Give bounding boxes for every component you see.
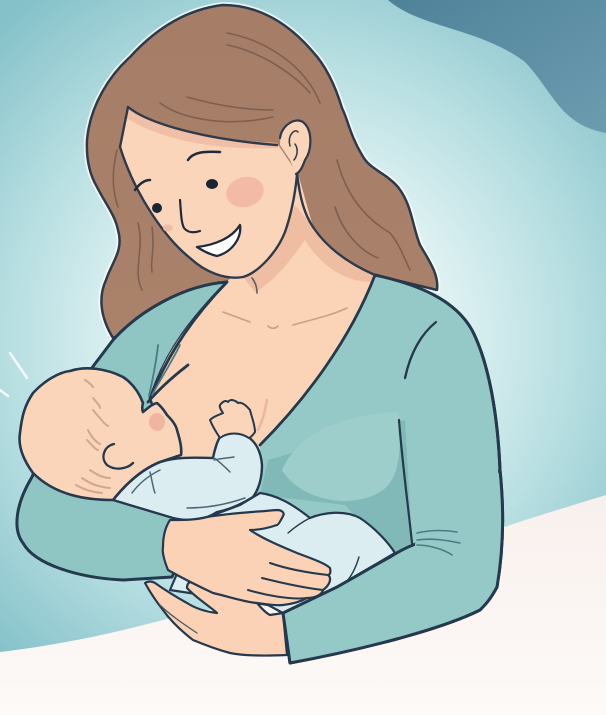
blanket [170, 493, 395, 613]
cardigan folds [149, 345, 180, 396]
neck shadow [243, 205, 375, 292]
cardigan left side and arm [17, 282, 227, 580]
sleeve creases [132, 457, 245, 508]
baby cheek [149, 413, 165, 431]
decorative wave: top right [388, 0, 606, 133]
baby ear [103, 444, 133, 469]
baby hair strokes [76, 380, 110, 493]
sparkle lines [0, 353, 27, 396]
nose [180, 200, 200, 232]
elbow folds [417, 531, 460, 555]
blanket creases [288, 518, 359, 582]
cardigan shading [260, 420, 412, 556]
upper seam line [405, 322, 436, 378]
collarbones [223, 278, 347, 430]
neck and chest skin [152, 170, 375, 480]
baby head [20, 368, 181, 500]
cardigan body [100, 275, 503, 663]
brows [135, 152, 220, 190]
mother [17, 5, 503, 663]
ear [280, 120, 310, 174]
hair [87, 5, 437, 338]
mother's forearm sleeve [283, 470, 503, 663]
neckline edges [148, 275, 375, 445]
baby sleeve [113, 433, 262, 520]
baby [20, 368, 395, 613]
decorative wave: bottom floor [0, 495, 606, 715]
sleeve seam lines [399, 322, 436, 543]
face [120, 107, 375, 278]
sleeve interior fill [415, 300, 499, 546]
breast highlight [282, 412, 400, 501]
outer sleeve edge [472, 330, 500, 470]
lower hand creases [160, 605, 197, 633]
mother's lower hand [145, 582, 287, 656]
hairline and jaw [120, 107, 375, 278]
finger lines [248, 563, 328, 598]
forehead shadow [126, 107, 279, 148]
eyes [206, 179, 218, 189]
smile [197, 225, 240, 256]
baby hand [210, 400, 255, 438]
mother's upper hand [163, 510, 330, 605]
cheek [223, 173, 267, 211]
